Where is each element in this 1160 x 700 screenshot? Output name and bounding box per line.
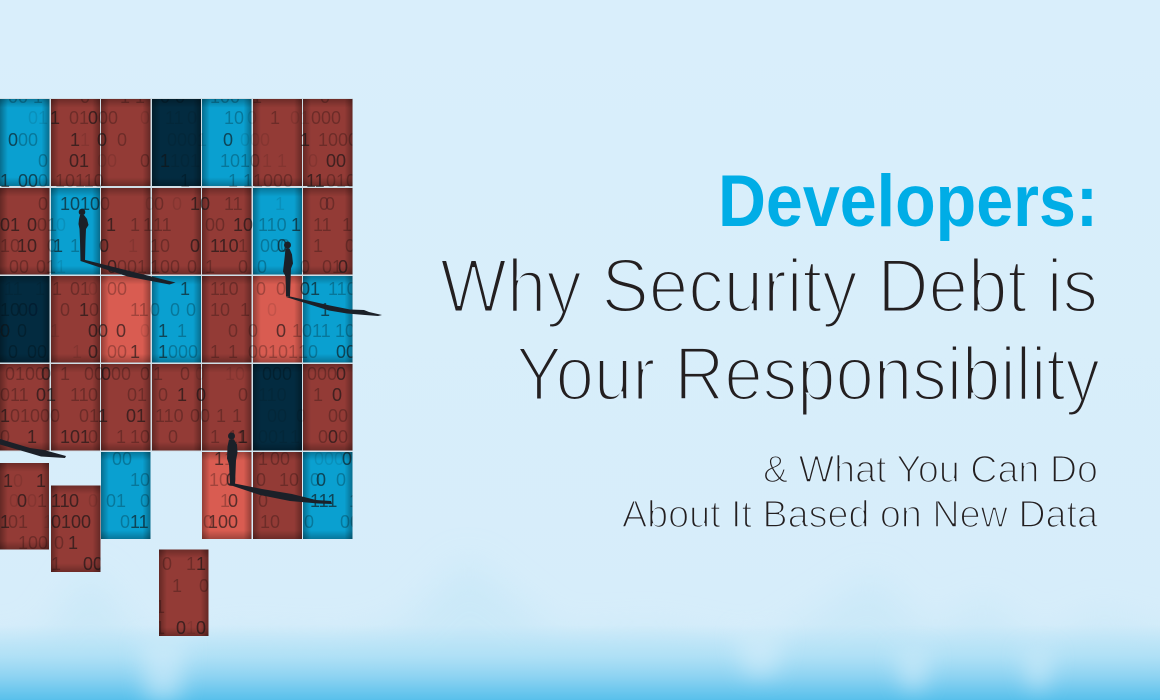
binary digits overlay: 1000 xyxy=(253,171,293,191)
binary digits overlay: 1 xyxy=(313,236,323,256)
binary digits overlay: 01 xyxy=(69,108,89,128)
binary digits overlay: 0 xyxy=(176,618,186,638)
binary digits overlay: 1 xyxy=(228,342,238,362)
figure 2: silhouette with long shadow xyxy=(283,242,382,316)
binary digits overlay: 0 xyxy=(140,427,150,447)
binary digits overlay: 10 xyxy=(298,342,318,362)
binary digits overlay: 00 xyxy=(111,364,131,384)
binary digits overlay: 1 xyxy=(50,108,60,128)
binary digits overlay: 11 xyxy=(313,215,332,235)
panels: blue xyxy=(0,99,352,539)
binary digits overlay: 0 xyxy=(41,364,51,384)
binary digits overlay: 1 xyxy=(153,364,163,384)
binary digits overlay: 00 xyxy=(9,257,29,277)
binary digits overlay: 0 xyxy=(228,321,238,341)
binary digits overlay: 0 xyxy=(56,215,66,235)
binary digits overlay: 00 xyxy=(18,300,38,320)
binary digits overlay: 1 xyxy=(210,342,220,362)
binary digits overlay: 1 xyxy=(172,576,182,596)
binary digits overlay: 000 xyxy=(314,449,344,469)
binary digits overlay: 0 xyxy=(60,300,70,320)
binary digits overlay: 0 xyxy=(80,87,90,107)
binary digits overlay: 0 xyxy=(325,194,335,214)
binary digits overlay: 1 xyxy=(238,427,248,447)
title: Why Security Debt is: Why Security Debt is xyxy=(440,244,1098,329)
binary digits overlay: 110 xyxy=(258,215,287,235)
binary digits overlay: 0 xyxy=(97,130,107,150)
figure 3: silhouette with long shadow xyxy=(227,432,332,504)
binary digits overlay: 1 xyxy=(35,279,45,299)
binary digits overlay: 00 xyxy=(270,449,290,469)
binary digits overlay: 11 xyxy=(224,194,243,214)
binary digits overlay: 10 xyxy=(130,470,150,490)
binary digits overlay: 000 xyxy=(307,364,337,384)
binary digits overlay: 000 xyxy=(260,236,290,256)
binary digits overlay: 0 xyxy=(170,300,180,320)
binary digits overlay: 11 xyxy=(70,385,89,405)
binary digits overlay: 110 xyxy=(328,279,357,299)
panels: light red xyxy=(101,276,302,539)
binary digits overlay: 0100 xyxy=(51,512,91,532)
binary digits overlay: 0 xyxy=(345,236,355,256)
binary digits overlay: 11 xyxy=(228,427,247,447)
binary digits overlay: 1 xyxy=(180,279,190,299)
binary digits overlay: 0 xyxy=(248,321,258,341)
binary digits overlay: 10 xyxy=(233,215,253,235)
binary digits overlay: 1 xyxy=(300,130,310,150)
binary digits overlay: 0 xyxy=(88,279,98,299)
binary digits overlay: 0 xyxy=(107,257,117,277)
binary digits overlay: 0 xyxy=(172,194,182,214)
binary digits overlay: 0 xyxy=(342,449,352,469)
binary digits overlay: 0 xyxy=(187,108,197,128)
binary digits overlay: 0 xyxy=(300,257,310,277)
binary digits overlay: 0 xyxy=(228,512,238,532)
binary digits overlay: 00 xyxy=(84,364,104,384)
binary digits overlay: 10 xyxy=(224,108,244,128)
binary digits overlay: 10110 xyxy=(55,171,104,191)
binary digits overlay: 0 xyxy=(180,364,190,384)
binary digits overlay: 0 0 xyxy=(160,87,185,107)
binary digits overlay: 0 xyxy=(260,130,270,150)
binary digits overlay: 1 xyxy=(130,342,140,362)
binary digits overlay: 1 xyxy=(238,236,248,256)
binary digits overlay: 0 xyxy=(38,171,48,191)
binary digits overlay: 1 xyxy=(342,215,352,235)
binary digits overlay: 0 xyxy=(140,108,150,128)
binary digits overlay: 1 xyxy=(313,385,323,405)
binary digits overlay: 1 xyxy=(51,554,61,574)
binary digits overlay: 0 xyxy=(336,364,346,384)
binary digits overlay: 0 xyxy=(28,300,38,320)
binary digits overlay: 0 xyxy=(17,321,27,341)
binary digits overlay: 0 xyxy=(99,236,109,256)
binary digits overlay: 0001 xyxy=(167,130,207,150)
binary digits overlay: 0 xyxy=(247,108,257,128)
binary digits overlay: 1 xyxy=(177,321,187,341)
binary digits overlay: 1 xyxy=(106,215,116,235)
binary digits overlay: 01 xyxy=(0,215,20,235)
binary digits overlay: 001 xyxy=(258,427,288,447)
binary digits overlay: 1 xyxy=(220,491,230,511)
binary digits overlay xyxy=(0,87,360,638)
binary digits overlay: 1 xyxy=(275,194,285,214)
binary digits overlay: 0 xyxy=(320,87,330,107)
binary digits overlay: 1 xyxy=(186,554,196,574)
binary digits overlay: 11 xyxy=(153,215,172,235)
subtitle: About It Based on New Data xyxy=(622,494,1099,536)
binary digits overlay: 1 xyxy=(0,171,10,191)
binary digits overlay: 001 xyxy=(117,257,147,277)
binary digits overlay: 1 xyxy=(205,257,215,277)
binary digits overlay: 00 xyxy=(107,342,127,362)
binary digits overlay: 0 xyxy=(47,236,57,256)
binary digits overlay: 110 xyxy=(210,236,239,256)
binary digits overlay: 1 xyxy=(186,618,196,638)
binary digits overlay: 0 xyxy=(203,512,213,532)
binary digits overlay: 0 xyxy=(296,406,306,426)
binary digits overlay: 0 xyxy=(154,194,164,214)
binary digits overlay: 00 xyxy=(18,130,38,150)
binary digits overlay: 0 xyxy=(168,427,178,447)
misty blue haze along the bottom edge xyxy=(0,560,1160,700)
binary digits overlay: 1 xyxy=(0,406,10,426)
binary digits overlay: 10 xyxy=(279,470,299,490)
binary digits overlay: 00 xyxy=(240,130,260,150)
binary digits overlay: 0 xyxy=(316,470,326,490)
binary digits overlay: 00 xyxy=(205,215,225,235)
binary digits overlay: 0 xyxy=(0,427,10,447)
binary digits overlay: 1 xyxy=(160,151,170,171)
binary digits overlay: 0101 xyxy=(258,342,298,362)
binary digits overlay: 000 xyxy=(311,108,341,128)
binary digits overlay: 0 xyxy=(223,130,233,150)
binary digits overlay: 0 xyxy=(258,491,268,511)
binary digits overlay: 101 xyxy=(60,427,90,447)
binary digits overlay: 0 xyxy=(140,151,150,171)
binary digits overlay: 1 1 xyxy=(120,87,145,107)
binary digits overlay: 10 xyxy=(260,512,280,532)
binary digits overlay: 1 xyxy=(158,342,168,362)
binary digits overlay: 1 xyxy=(210,427,220,447)
binary digits overlay: 00 xyxy=(340,512,360,532)
binary digits overlay: 1 xyxy=(68,533,78,553)
binary digits overlay: 1 xyxy=(128,236,138,256)
binary digits overlay: 110 xyxy=(210,279,239,299)
panels: red xyxy=(0,99,352,636)
binary digits overlay: 0 xyxy=(256,279,266,299)
title: Your Responsibility: Your Responsibility xyxy=(516,332,1100,417)
binary digits overlay: 0 xyxy=(88,342,98,362)
binary digits overlay: 1 xyxy=(60,364,70,384)
binary digits overlay: 0 xyxy=(257,257,267,277)
binary digits overlay: 0 xyxy=(100,194,110,214)
binary digits overlay: 01 xyxy=(28,108,48,128)
binary digits overlay: 1 xyxy=(70,130,80,150)
binary digits overlay: 11 xyxy=(130,300,149,320)
binary digits overlay: 1 xyxy=(36,471,46,491)
binary digits overlay: 10 xyxy=(17,236,37,256)
binary digits overlay: 1 xyxy=(177,385,187,405)
title block xyxy=(440,161,1100,417)
binary digits overlay: 0 xyxy=(145,194,155,214)
binary digits overlay: 0 xyxy=(304,512,314,532)
binary digits overlay: 1 xyxy=(70,236,80,256)
binary digits overlay: 0 xyxy=(267,300,277,320)
binary digits overlay: 00 xyxy=(328,406,348,426)
binary digits overlay: 01 xyxy=(36,257,56,277)
binary digits overlay: 0 xyxy=(256,470,266,490)
binary digits overlay: 0 xyxy=(69,491,79,511)
binary digits overlay: 1 xyxy=(143,215,153,235)
binary digits overlay: 10 xyxy=(0,236,20,256)
binary digits overlay: 100 xyxy=(150,257,180,277)
binary digits overlay: 1 xyxy=(252,87,262,107)
binary digits overlay: 0 xyxy=(308,151,318,171)
binary digits overlay: 00 xyxy=(18,171,38,191)
binary digits overlay: 01 xyxy=(69,151,89,171)
binary digits overlay: 1011 xyxy=(292,321,331,341)
binary digits overlay: 010 xyxy=(326,171,356,191)
binary digits overlay: 01 xyxy=(300,279,320,299)
binary digits overlay: 01 xyxy=(37,215,57,235)
binary digits overlay: 0 xyxy=(88,108,98,128)
binary digits overlay: 000 xyxy=(262,364,292,384)
binary digits overlay: 0 xyxy=(238,385,248,405)
binary digits overlay: 0 xyxy=(186,300,196,320)
binary digits overlay: 1 xyxy=(3,471,13,491)
binary digits overlay: 00 xyxy=(97,151,117,171)
binary digits overlay: 011 xyxy=(0,385,29,405)
binary digits overlay: 1 xyxy=(27,427,37,447)
binary digits overlay: 0 xyxy=(336,470,346,490)
binary digits overlay: 0 xyxy=(54,533,64,553)
binary digits overlay: 0 xyxy=(319,194,329,214)
binary digits overlay: 10 xyxy=(335,321,355,341)
binary digits overlay: 000 xyxy=(168,342,198,362)
binary digits overlay: 1 xyxy=(79,300,89,320)
binary digits overlay: 0 xyxy=(338,427,348,447)
binary digits overlay: 0 xyxy=(89,300,99,320)
figure 1: silhouette with long shadow xyxy=(78,209,176,284)
binary digits overlay: 0 xyxy=(9,491,19,511)
binary digits overlay: 0 xyxy=(318,427,328,447)
binary digits overlay: 1 xyxy=(180,171,190,191)
binary digits overlay: 0 xyxy=(196,618,206,638)
binary digits overlay: 00 xyxy=(83,554,103,574)
binary digits overlay: 0 xyxy=(338,257,348,277)
binary digits overlay: 00 xyxy=(98,108,118,128)
binary digits overlay: 0 xyxy=(277,236,287,256)
binary digits overlay: 0 xyxy=(120,512,130,532)
binary digits overlay: 1 1 xyxy=(262,151,287,171)
binary digits overlay: 1 xyxy=(50,321,60,341)
binary digits overlay: 0 xyxy=(116,321,126,341)
binary digits overlay: 1 xyxy=(320,300,330,320)
subtitle xyxy=(622,449,1099,536)
binary digits overlay: 1 xyxy=(155,597,165,617)
binary digits overlay: 1 xyxy=(270,108,280,128)
binary digits overlay: 0 xyxy=(196,385,206,405)
binary digits overlay: 00 xyxy=(112,449,132,469)
binary digits overlay: 1 xyxy=(349,491,359,511)
binary digits overlay: 1 xyxy=(72,342,82,362)
binary digits overlay: 0 xyxy=(140,321,150,341)
binary digits overlay: 11 xyxy=(306,171,325,191)
binary digits overlay: 11 xyxy=(4,279,23,299)
binary digits overlay: 0 xyxy=(226,470,236,490)
binary digits overlay: 1 xyxy=(37,491,47,511)
binary digits overlay: 1010 xyxy=(60,194,100,214)
binary digits overlay: 1 xyxy=(52,279,62,299)
binary digits overlay: 0 xyxy=(88,427,98,447)
binary digits overlay: 1000 xyxy=(318,130,358,150)
binary digits overlay: 0 xyxy=(199,576,209,596)
binary digits overlay: 11 xyxy=(130,512,149,532)
grid gap lines xyxy=(0,98,353,452)
binary digits overlay: 10 xyxy=(225,364,245,384)
binary digits overlay: 1 xyxy=(196,554,206,574)
binary digits overlay: 0 xyxy=(101,364,111,384)
binary digits overlay: 0 xyxy=(276,279,286,299)
binary digits overlay: 0 xyxy=(17,491,27,511)
binary digits overlay: 0 xyxy=(158,385,168,405)
binary digits overlay: 1 xyxy=(240,300,250,320)
binary digits overlay: 0 xyxy=(228,491,238,511)
binary digits overlay: 00 xyxy=(336,342,356,362)
binary digits overlay: 0 xyxy=(27,215,37,235)
binary digits overlay: 01 xyxy=(8,512,28,532)
title: Developers: Developers: xyxy=(718,161,1098,242)
binary digits overlay: 0 xyxy=(238,257,248,277)
binary digits overlay: 1 xyxy=(130,215,140,235)
binary digits overlay: 00 xyxy=(27,342,47,362)
subtitle: & What You Can Do xyxy=(763,449,1098,491)
binary digits overlay: 0 xyxy=(190,236,200,256)
binary digits overlay: 11 xyxy=(165,108,184,128)
binary digits overlay: 0 xyxy=(140,364,150,384)
binary digits overlay: 10 xyxy=(0,300,20,320)
binary digits overlay: 00 1 xyxy=(8,87,43,107)
illustration: grid of binary-code door panels xyxy=(0,87,382,638)
binary digits overlay: 0 xyxy=(150,300,160,320)
shadow of figure outside the frame xyxy=(0,439,66,458)
binary digits overlay: 00 xyxy=(326,151,346,171)
binary digits overlay: 0 xyxy=(117,130,127,150)
binary digits overlay: 10 xyxy=(190,194,210,214)
binary digits overlay: 1 xyxy=(214,449,224,469)
binary digits overlay: 10 xyxy=(210,300,230,320)
binary digits overlay: 1 xyxy=(116,427,126,447)
binary digits overlay: 01 xyxy=(127,385,147,405)
binary digits overlay: 1 xyxy=(98,406,108,426)
binary digits overlay: 0 xyxy=(27,491,37,511)
binary digits overlay: 1 xyxy=(216,406,226,426)
binary digits overlay: 1 xyxy=(155,618,165,638)
binary digits overlay: 00 xyxy=(190,406,210,426)
binary digits overlay: 0 xyxy=(8,130,18,150)
binary digits overlay: 1 xyxy=(224,449,234,469)
binary digits overlay: 0 xyxy=(195,364,205,384)
binary digits overlay: 0 xyxy=(0,321,10,341)
binary digits overlay: 0 xyxy=(248,342,258,362)
binary digits overlay: 01 xyxy=(70,279,90,299)
binary digits overlay: 1 xyxy=(232,406,242,426)
binary digits overlay: 101 xyxy=(170,151,200,171)
binary digits overlay: 111 xyxy=(310,491,337,511)
binary digits overlay: 10 xyxy=(150,236,170,256)
binary digits overlay: 110 xyxy=(258,385,287,405)
binary digits overlay: 01 xyxy=(36,385,56,405)
binary digits overlay: 1 xyxy=(258,449,268,469)
panels: dark navy xyxy=(0,99,302,450)
binary digits overlay: 1 xyxy=(291,215,301,235)
binary digits overlay: 1 xyxy=(56,257,66,277)
binary digits overlay: 01 xyxy=(322,257,342,277)
binary digits overlay: 1 xyxy=(43,512,53,532)
binary digits overlay: 0 xyxy=(8,342,18,362)
binary digits overlay: 00 xyxy=(88,321,108,341)
binary digits overlay: 0 xyxy=(38,194,48,214)
binary digits overlay: 0 xyxy=(310,470,320,490)
binary digits overlay: 00 xyxy=(267,406,287,426)
binary digits overlay: 01 xyxy=(290,108,310,128)
binary digits overlay: 0 xyxy=(332,385,342,405)
binary digits overlay: 1 xyxy=(80,130,90,150)
binary digits overlay: 0100 xyxy=(5,364,45,384)
binary digits overlay: 1 xyxy=(0,512,10,532)
binary digits overlay: 10 xyxy=(208,512,228,532)
binary digits overlay: 100 xyxy=(210,87,240,107)
binary digits overlay: 0 xyxy=(88,385,98,405)
binary digits overlay: 0 xyxy=(328,427,338,447)
binary digits overlay: 0 xyxy=(88,491,98,511)
binary digits overlay: 01 xyxy=(126,406,146,426)
binary digits overlay: 10 xyxy=(209,470,229,490)
binary digits overlay: 110 xyxy=(155,406,184,426)
binary digits overlay: 1 xyxy=(158,321,168,341)
binary digits overlay: 1 1 xyxy=(228,171,253,191)
binary digits overlay: 0 xyxy=(162,554,172,574)
binary digits overlay: 01000 xyxy=(10,406,60,426)
binary digits overlay: 1 xyxy=(53,236,63,256)
binary digits overlay: 01 xyxy=(106,491,126,511)
binary digits overlay: 1010 xyxy=(220,151,260,171)
binary digits overlay: 11 xyxy=(51,491,70,511)
binary digits overlay: 0 xyxy=(13,471,23,491)
binary digits overlay: 01 xyxy=(79,406,99,426)
binary digits overlay: 1 xyxy=(130,427,140,447)
binary digits overlay: 0 xyxy=(276,321,286,341)
binary digits overlay: 100 xyxy=(18,533,48,553)
binary digits overlay: 0 xyxy=(140,491,150,511)
binary digits overlay: 1 xyxy=(290,427,300,447)
binary digits overlay: 00 xyxy=(107,279,127,299)
binary digits overlay: 0 xyxy=(187,257,197,277)
binary digits overlay: 0 xyxy=(38,151,48,171)
